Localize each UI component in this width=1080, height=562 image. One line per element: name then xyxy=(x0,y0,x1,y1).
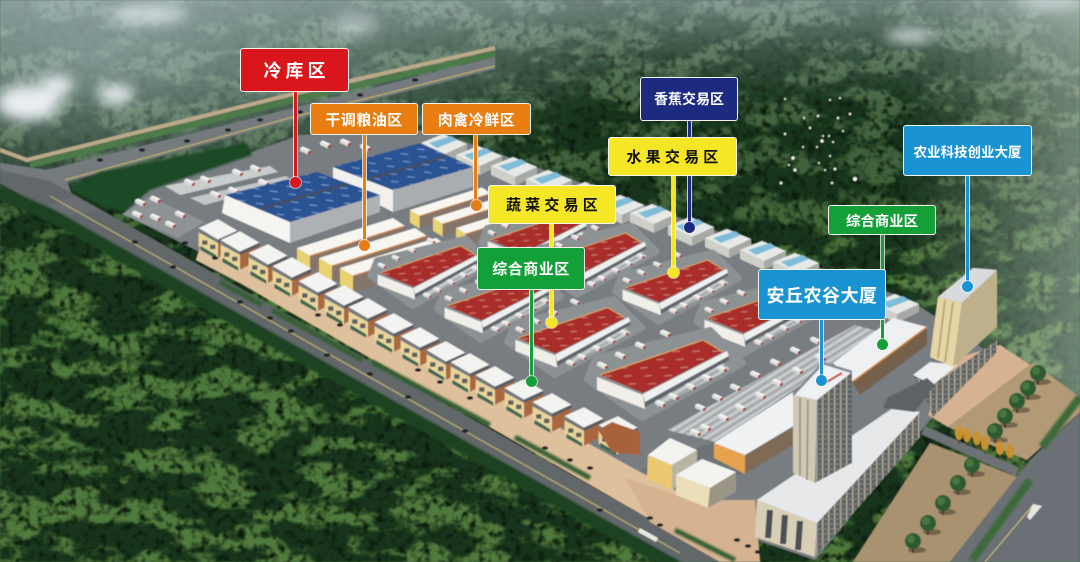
red-roof trading halls xyxy=(371,206,828,417)
front row of shops xyxy=(199,219,637,456)
label: 综合商业区 xyxy=(477,247,585,290)
label: 综合商业区: 综合商业区 xyxy=(492,261,570,278)
callout: 水果交易区 xyxy=(608,137,737,279)
label: 肉禽冷鲜区: 肉禽冷鲜区 xyxy=(438,112,515,128)
callout: 冷库区 xyxy=(240,48,694,251)
label: 农业科技创业大厦 xyxy=(903,125,1032,176)
central truck parking lot xyxy=(667,325,880,442)
label: 香蕉交易区: 香蕉交易区 xyxy=(654,91,724,107)
callout: 安丘农谷大厦 xyxy=(758,269,887,387)
label: 蔬菜交易区: 蔬菜交易区 xyxy=(506,197,602,214)
tree belt and rear parking xyxy=(70,139,371,238)
callout: 综合商业区 (front) xyxy=(477,247,585,387)
label: 安丘农谷大厦 xyxy=(758,269,886,320)
label: 冷库区: 冷库区 xyxy=(264,61,330,81)
main tower and podium xyxy=(755,363,935,557)
label: 干调粮油区: 干调粮油区 xyxy=(325,112,403,128)
label: 综合商业区 xyxy=(828,205,936,235)
label: 综合商业区: 综合商业区 xyxy=(846,214,918,230)
cars parked along shops xyxy=(182,241,761,554)
label: 安丘农谷大厦: 安丘农谷大厦 xyxy=(766,286,878,306)
label: 蔬菜交易区 xyxy=(488,185,616,224)
back expressway with hedges xyxy=(0,48,495,207)
label: 干调粮油区 xyxy=(310,103,418,135)
label: 冷库区 xyxy=(240,48,349,92)
label: 水果交易区 xyxy=(608,137,737,176)
blue-roof cold storage warehouses xyxy=(222,143,473,243)
rear row of small white buildings with blue skylights xyxy=(421,134,919,323)
front main road with roadside trees xyxy=(0,170,720,562)
callout: 肉禽冷鲜区 xyxy=(422,103,531,212)
flock of birds xyxy=(780,97,857,184)
technology tower xyxy=(913,268,997,417)
callout: 蔬菜交易区 xyxy=(488,185,616,329)
dry goods and meat market long buildings xyxy=(297,188,537,293)
mist clouds xyxy=(0,0,1080,121)
label: 香蕉交易区 xyxy=(640,77,738,121)
label: 水果交易区: 水果交易区 xyxy=(626,149,722,166)
sand plots, trees and right-hand road xyxy=(853,345,1080,562)
label: 肉禽冷鲜区 xyxy=(422,103,531,135)
callout: 综合商业区 (rear) xyxy=(828,205,936,351)
site ground xyxy=(125,130,1000,562)
callout: 香蕉交易区 xyxy=(640,77,738,234)
roadside hedges in front of shops xyxy=(220,282,735,560)
callout: 农业科技创业大厦 xyxy=(816,125,1032,380)
callout: 干调粮油区 xyxy=(310,103,418,251)
label: 农业科技创业大厦: 农业科技创业大厦 xyxy=(914,144,1022,160)
corner shops by main road xyxy=(598,422,736,508)
commercial mall strip xyxy=(714,318,927,474)
